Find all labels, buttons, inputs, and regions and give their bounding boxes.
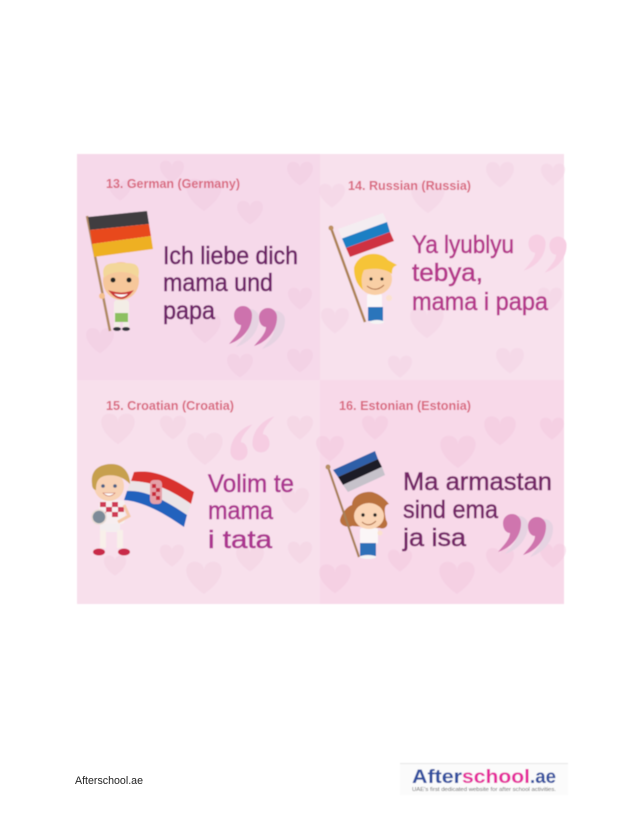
icon: boy with German outfit — [99, 262, 139, 331]
main phrase: mama i papa — [412, 288, 548, 316]
heading: 15. Croatian (Croatia) — [106, 398, 234, 413]
main phrase: mama — [208, 497, 273, 525]
panel: Estonian — [316, 380, 566, 604]
heading: 16. Estonian (Estonia) — [339, 398, 471, 413]
logo: afterschool.ae: After — [412, 767, 463, 788]
main phrase: ja isa — [402, 524, 466, 552]
logo: afterschool.ae: school — [462, 767, 530, 788]
main phrase — [208, 470, 294, 554]
icon: footballer child — [92, 464, 130, 556]
main phrase: tebya, — [412, 259, 483, 287]
icon: closing quote, faded — [524, 235, 567, 273]
main phrase: sind ema — [403, 496, 498, 524]
main phrase: papa — [163, 297, 215, 325]
main phrase: i tata — [208, 526, 272, 554]
main phrase: Ich liebe dich — [163, 242, 298, 270]
icon: boy with Russian flag — [354, 254, 397, 324]
icon: Estonian flag — [326, 451, 385, 557]
infographic image: four language panels — [77, 154, 567, 604]
main phrase — [412, 231, 548, 316]
icon: Croatian flag — [124, 471, 194, 527]
icon: German flag — [87, 211, 153, 331]
main phrase: Ma armastan — [403, 468, 552, 496]
icon: opening quote, faded — [230, 416, 274, 460]
main phrase: mama und — [163, 269, 273, 297]
logo: afterschool.ae — [400, 763, 568, 795]
panel: German — [77, 154, 320, 380]
heading: 14. Russian (Russia) — [348, 178, 471, 193]
main phrase: Ya lyublyu — [412, 231, 514, 259]
heading: 13. German (Germany) — [106, 176, 240, 191]
main phrase — [163, 242, 298, 325]
icon: closing quote — [498, 514, 553, 557]
panel: Russian — [319, 154, 567, 380]
icon: Russian flag — [328, 213, 394, 322]
main phrase: Volim te — [208, 470, 294, 498]
logo: afterschool.ae: .ae — [530, 767, 556, 788]
main phrase — [402, 468, 552, 552]
logo: afterschool.ae: UAE's first dedicated website for after school activities. — [412, 787, 557, 793]
icon: closing quote — [229, 306, 285, 349]
panel: Croatian — [77, 380, 320, 604]
footer text: Afterschool.ae — [75, 775, 143, 787]
icon: girl with Estonian flag — [340, 492, 389, 559]
